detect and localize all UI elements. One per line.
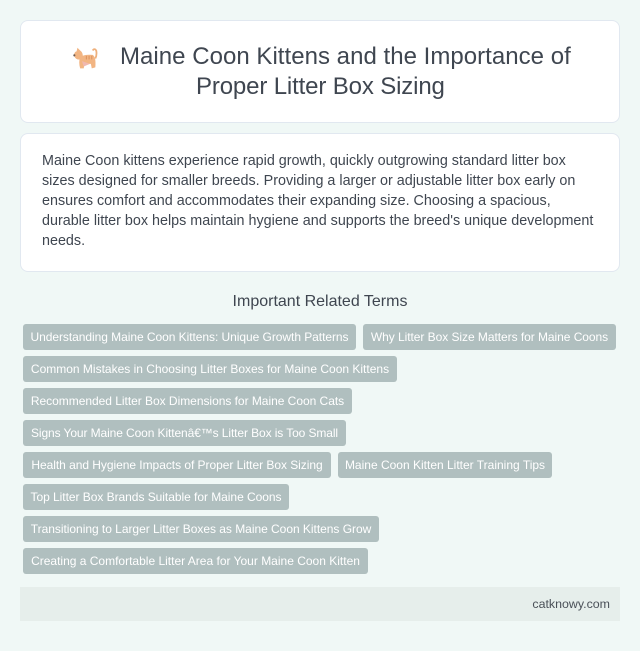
footer bar <box>20 587 620 621</box>
tag: Maine Coon Kitten Litter Training Tips <box>345 458 545 472</box>
tag: Common Mistakes in Choosing Litter Boxes for Maine Coon Kittens <box>31 362 389 376</box>
summary text: Maine Coon kittens experience rapid growth, quickly outgrowing standard litter box <box>42 153 566 169</box>
tag <box>23 388 352 414</box>
summary text: ensures comfort and accommodates their expanding size. Choosing a spacious, <box>42 193 551 209</box>
panel: title card <box>20 20 620 123</box>
tag <box>23 420 346 446</box>
tag <box>338 452 552 478</box>
tag <box>23 324 356 350</box>
tag: Transitioning to Larger Litter Boxes as Maine Coon Kittens Grow <box>31 522 371 536</box>
panel: related term tags <box>23 324 616 574</box>
tag <box>23 516 379 542</box>
heading: important related terms: Important Related Terms <box>233 293 407 310</box>
summary text <box>42 153 594 249</box>
panel: summary card <box>20 133 620 272</box>
tag: Why Litter Box Size Matters for Maine Coons <box>371 330 608 344</box>
tag <box>23 452 331 478</box>
tag: Health and Hygiene Impacts of Proper Litter Box Sizing <box>31 458 323 472</box>
tag <box>23 548 368 574</box>
icon: cat <box>73 48 98 68</box>
tag <box>23 484 289 510</box>
title <box>120 43 571 100</box>
tag: Understanding Maine Coon Kittens: Unique Growth Patterns <box>30 330 349 344</box>
summary text: durable litter box helps maintain hygiene and supports the breed's unique development <box>42 213 593 229</box>
tag <box>23 356 397 382</box>
summary text: sizes designed for smaller breeds. Providing a larger or adjustable litter box early on <box>42 173 575 189</box>
footer source: catknowy.com <box>532 597 610 611</box>
tag <box>363 324 616 350</box>
tag: Recommended Litter Box Dimensions for Maine Coon Cats <box>31 394 344 408</box>
title: Proper Litter Box Sizing <box>196 73 445 100</box>
tag: Top Litter Box Brands Suitable for Maine Coons <box>31 490 281 504</box>
tag: Creating a Comfortable Litter Area for Your Maine Coon Kitten <box>31 554 360 568</box>
tag: Signs Your Maine Coon Kittenâ€™s Litter Box is Too Small <box>31 426 338 440</box>
summary text: needs. <box>42 233 85 249</box>
title: Maine Coon Kittens and the Importance of <box>120 43 571 70</box>
